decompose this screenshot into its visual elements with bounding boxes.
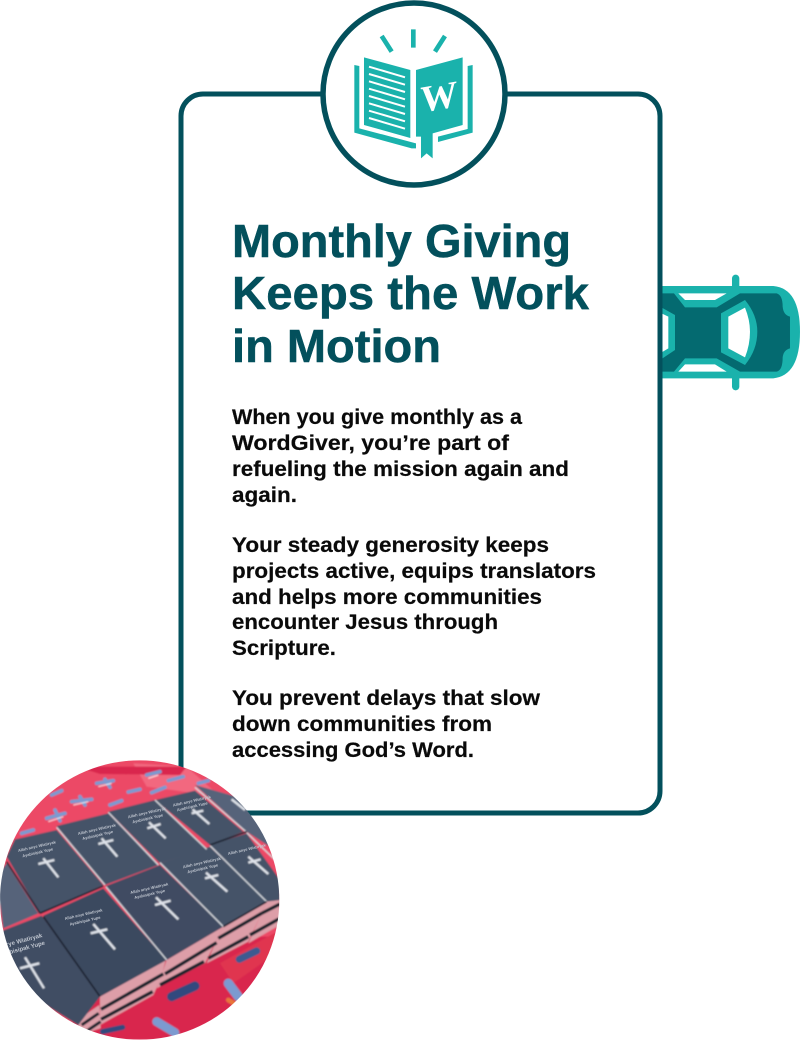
text block: paragraph one <box>232 406 569 507</box>
cover lettering: Ayabisipak Yupe <box>82 829 114 841</box>
cover lettering: Allah anye Wiatiryak <box>17 839 57 853</box>
cover lettering: Ayabisipak Yupe <box>132 812 164 824</box>
icon: open book with W <box>354 29 473 158</box>
text block: paragraph three: You prevent delays that slow <box>232 687 541 710</box>
title: in Motion <box>232 320 441 372</box>
text block: paragraph one: refueling the mission again and <box>232 458 569 481</box>
icon: open book with W: W <box>420 74 458 122</box>
text block: paragraph three <box>232 687 541 762</box>
cover lettering: Allah anye Wiatiryak <box>172 794 212 808</box>
text block: paragraph two: and helps more communities <box>232 586 542 609</box>
title: Keeps the Work <box>232 267 589 319</box>
text block: paragraph two: projects active, equips translators <box>232 560 596 583</box>
text block: paragraph one: When you give monthly as a <box>232 406 522 429</box>
cover lettering: Allah anye Wiatiryak <box>64 907 104 921</box>
icon: car <box>660 278 800 387</box>
text block: paragraph one: again. <box>232 484 297 507</box>
cover lettering: Ayabisipak Yupe <box>69 915 102 927</box>
cover lettering: Allah anye Wiatiryak <box>182 856 222 869</box>
cover lettering: Allah anye Wiatiryak <box>77 822 117 836</box>
cover lettering: Allah anye Wiatiryak <box>130 881 169 895</box>
title <box>232 215 589 372</box>
text block: paragraph two: Your steady generosity keeps <box>232 534 549 557</box>
cover lettering: Ayabisipak Yupe <box>22 846 54 858</box>
badge: circle behind book icon <box>323 3 505 185</box>
cover lettering: Ayabisipak Yupe <box>187 862 219 874</box>
cover lettering: Allah anye Wiatiryak <box>127 806 167 819</box>
cover lettering: rye Wiatiryak <box>6 933 44 949</box>
page edges <box>100 897 280 1025</box>
book edges <box>57 787 279 960</box>
text block: paragraph one: WordGiver, you’re part of <box>232 432 510 455</box>
crosses <box>20 799 268 988</box>
text block: paragraph two <box>232 534 596 660</box>
text block: paragraph three: down communities from <box>232 713 492 736</box>
cover lettering: Ayabisipak Yupe <box>176 800 209 812</box>
panel: rounded card outline <box>181 94 660 813</box>
photo: stacked Bibles on red cloth <box>0 750 290 1040</box>
title: Monthly Giving <box>232 215 571 267</box>
text block: paragraph two: Scripture. <box>232 637 336 660</box>
text block: paragraph three: accessing God’s Word. <box>232 739 474 762</box>
book covers <box>0 785 280 1025</box>
cover lettering: Ayabisipak Yupe <box>134 888 166 900</box>
text block: paragraph two: encounter Jesus through <box>232 611 498 634</box>
cover lettering: Allah anye Wiatiryak <box>227 842 267 856</box>
cover lettering <box>6 794 267 956</box>
cover lettering: bisipak Yupe <box>9 941 46 956</box>
